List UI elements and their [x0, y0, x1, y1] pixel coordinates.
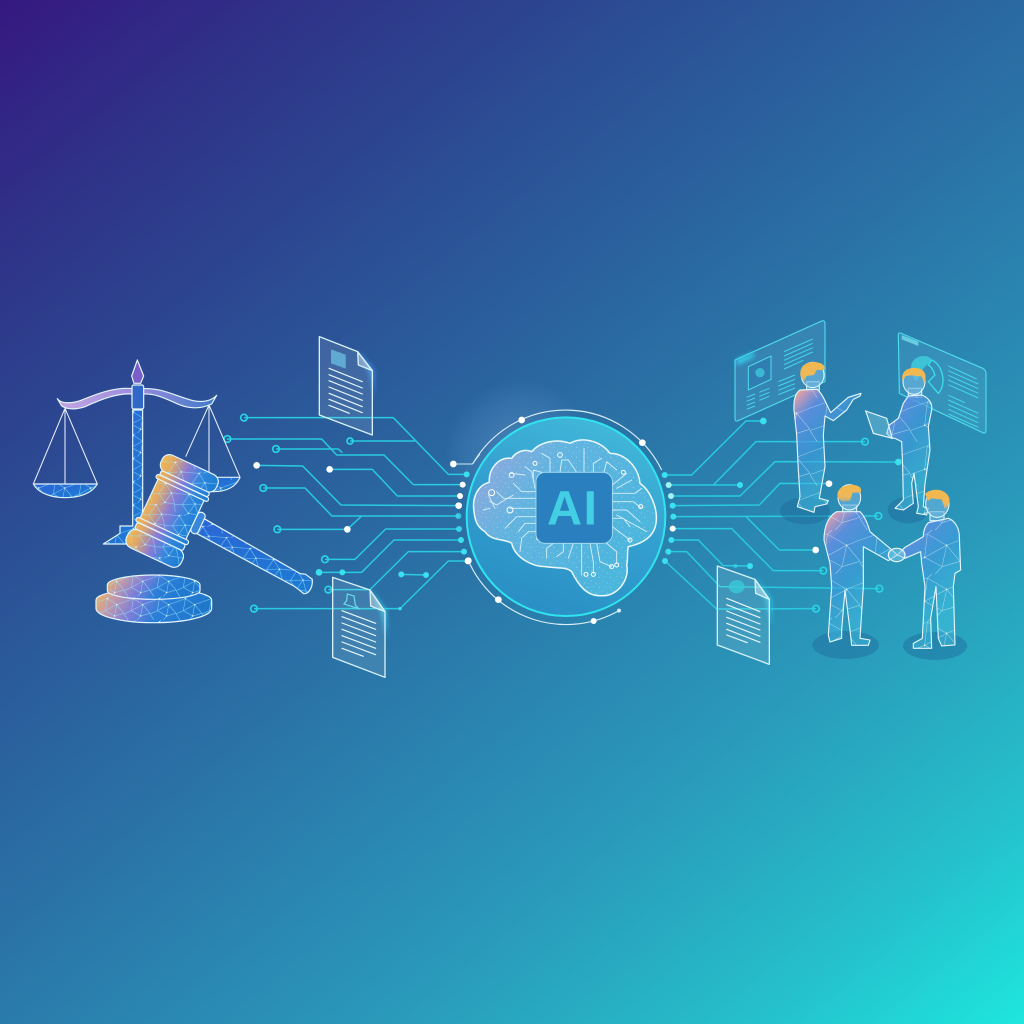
gavel head [123, 452, 221, 570]
beam collar [132, 385, 144, 409]
AI chip [536, 472, 612, 543]
left circuit lines [224, 414, 480, 612]
glow behind brain [445, 380, 595, 530]
floating screen right [898, 333, 986, 433]
spire [132, 360, 144, 383]
person with tablet [866, 368, 932, 515]
gavel [123, 452, 337, 624]
gavel handle [186, 511, 321, 595]
document bottom right [717, 566, 772, 664]
floating screen left [735, 321, 825, 421]
right circuit lines [662, 418, 902, 612]
person shaking hands right [888, 490, 961, 648]
person shadows [780, 497, 967, 660]
document bottom left [333, 577, 387, 677]
left pan [33, 408, 97, 498]
tablet [866, 411, 892, 438]
person pointing [794, 362, 861, 512]
beam [57, 388, 217, 409]
brain outline [474, 440, 656, 596]
handshake [888, 548, 905, 562]
right pan [186, 405, 240, 492]
disc [467, 417, 665, 616]
AI brain hub [465, 410, 665, 625]
person shaking hands left [824, 485, 897, 645]
outer arcs [465, 410, 662, 625]
pillar [103, 410, 153, 544]
document top left [319, 337, 374, 435]
sounding block [96, 575, 212, 623]
AI chip: AI [547, 481, 598, 535]
scales of justice [33, 360, 240, 544]
